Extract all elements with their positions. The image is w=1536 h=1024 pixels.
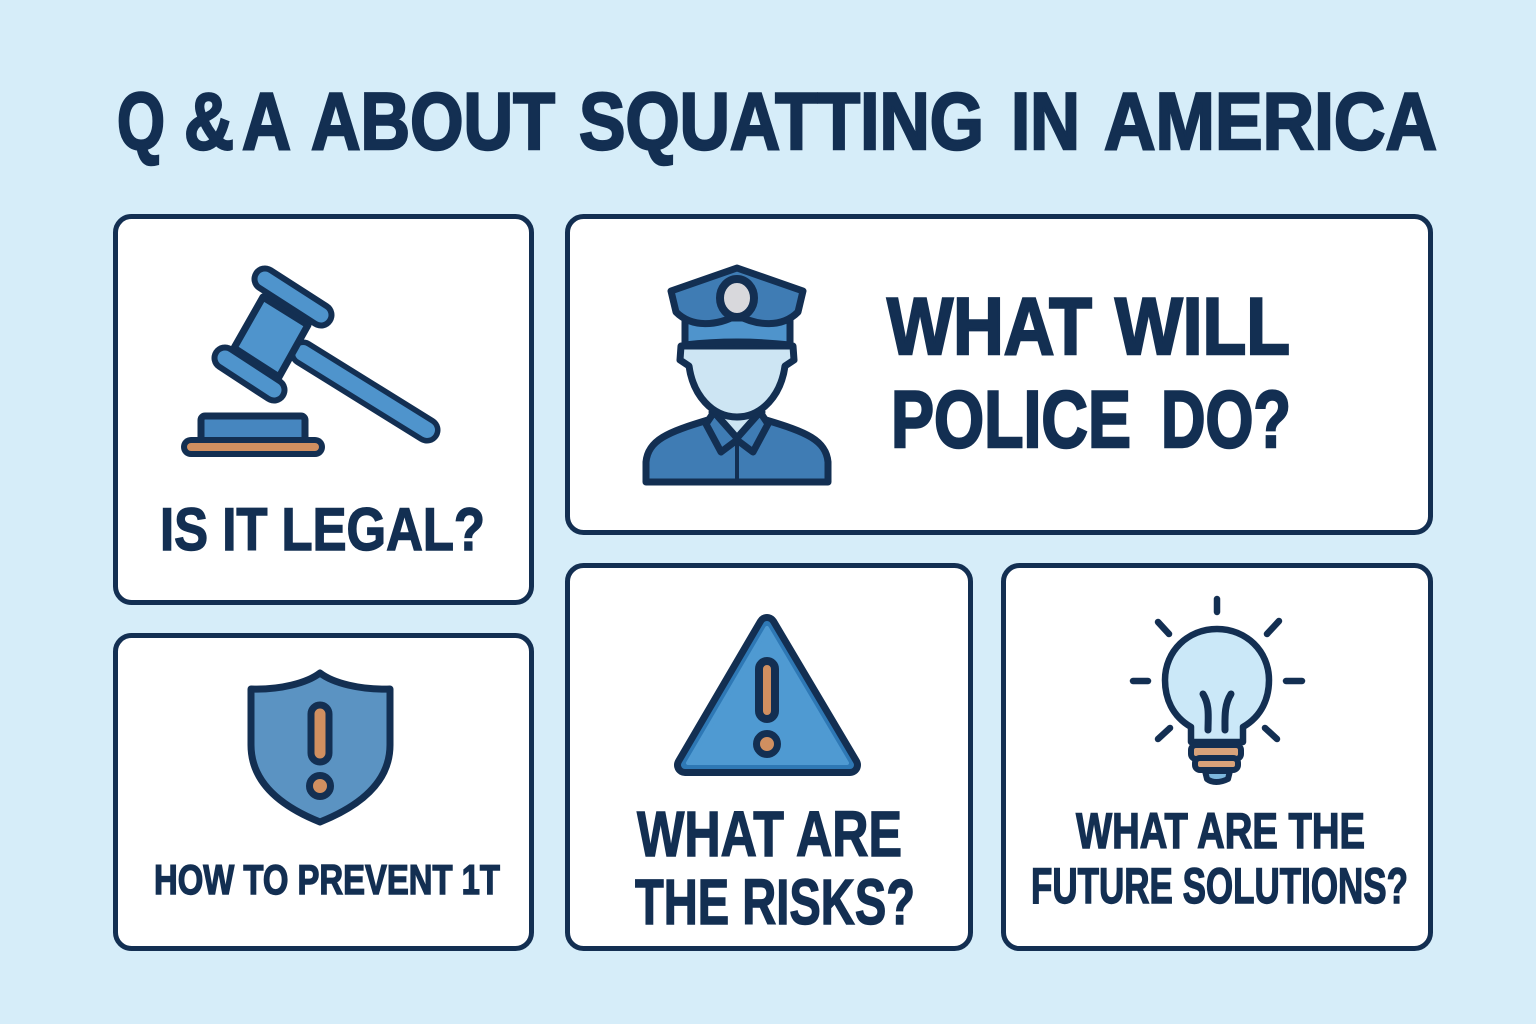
icon: warning triangle	[685, 625, 850, 765]
title: A	[242, 77, 291, 167]
label: what are the: WHAT ARE THE	[1076, 803, 1365, 859]
label: what will: WHAT	[887, 282, 1092, 372]
label: what are: WHAT ARE	[637, 798, 902, 870]
icon: shield with exclamation	[251, 673, 390, 822]
panel: how to prevent it	[116, 636, 532, 948]
title: AMERICA	[1104, 77, 1437, 167]
title: Q	[117, 77, 165, 167]
icon: police officer	[646, 268, 828, 482]
title: ABOUT	[311, 77, 555, 167]
label: what will	[887, 282, 1290, 372]
label: the risks: THE RISKS?	[635, 866, 915, 938]
label: what will: WILL	[1115, 282, 1290, 372]
label: police do: POLICE	[891, 375, 1131, 465]
label: police do: DO?	[1161, 375, 1291, 465]
panel: what are the risks	[568, 566, 970, 948]
panel: is it legal	[116, 216, 532, 602]
icon: light bulb	[1133, 599, 1302, 782]
label: is it legal: IS IT LEGAL?	[160, 496, 485, 563]
panel: what will police do	[568, 216, 1430, 532]
panel: future solutions	[1004, 566, 1430, 948]
title	[117, 77, 1437, 167]
title: IN	[1011, 77, 1080, 167]
label: how to prevent it: HOW TO PREVENT 1T	[154, 856, 500, 903]
title: &	[184, 77, 234, 167]
title: SQUATTING	[579, 77, 984, 167]
icon: gavel	[191, 279, 427, 447]
